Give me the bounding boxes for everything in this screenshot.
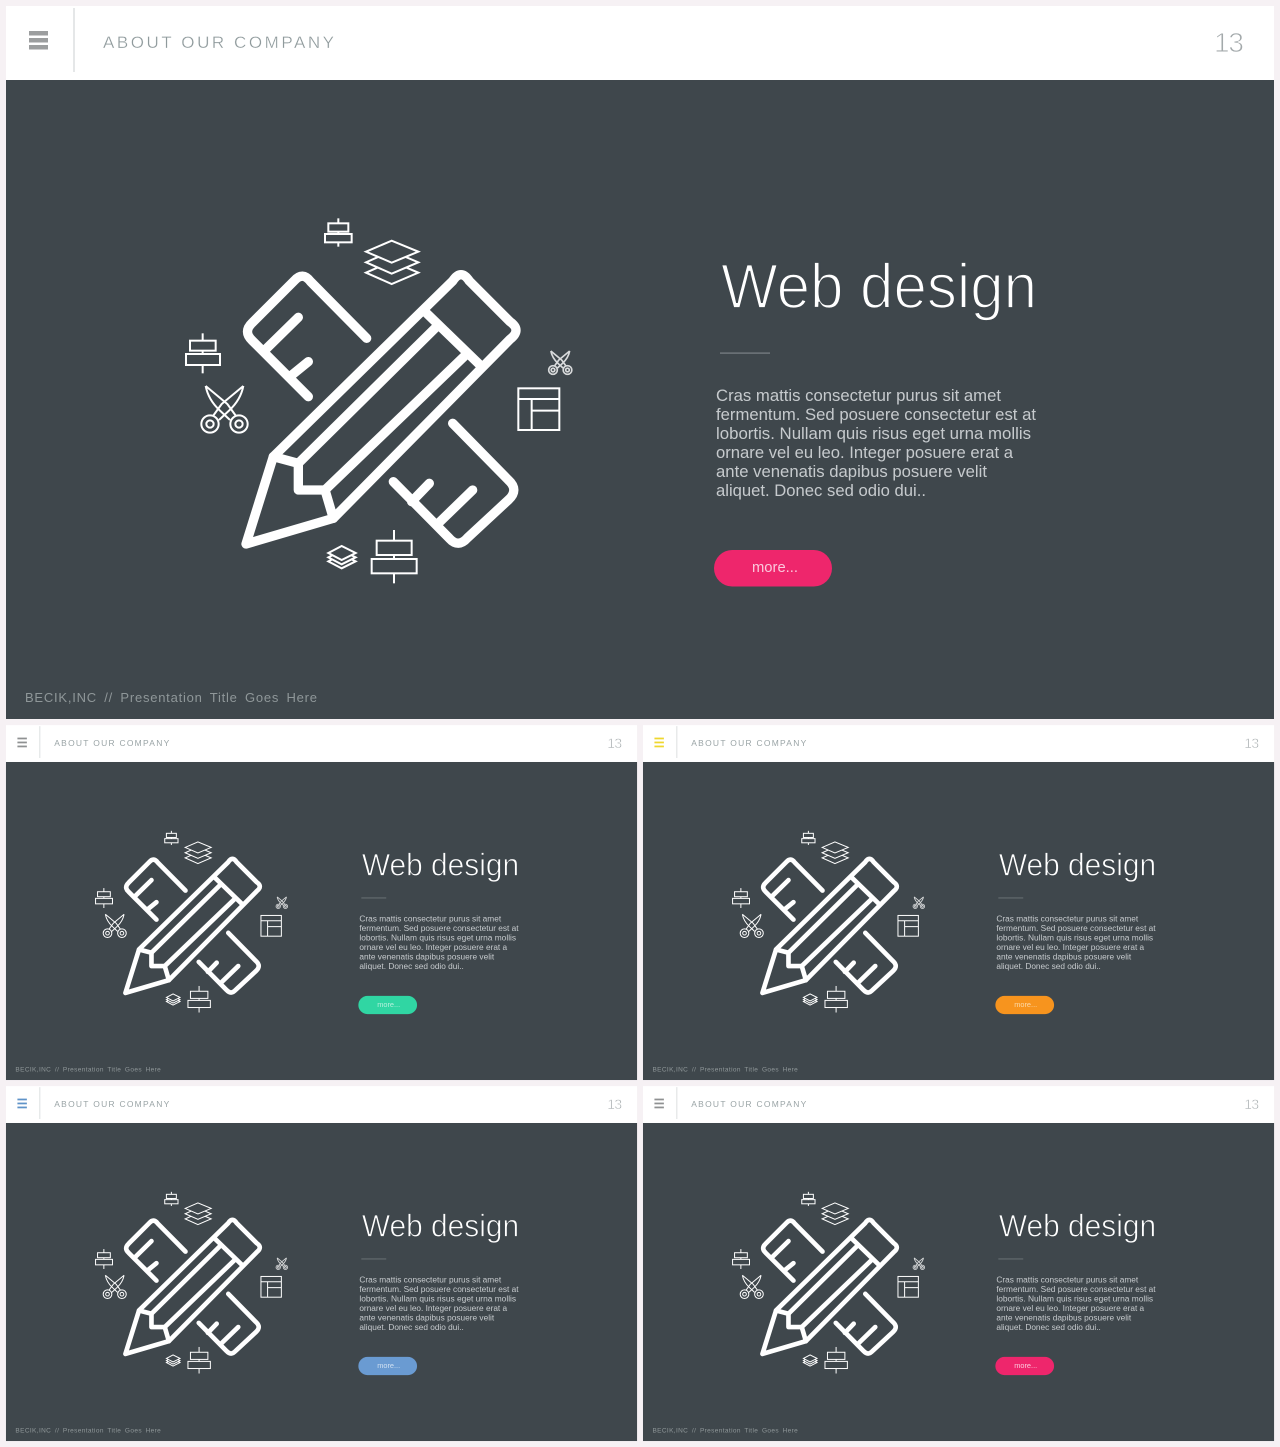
panel: main slide — [6, 6, 1274, 719]
body text: lobortis. Nullam quis risus eget urna mollis — [996, 1295, 1153, 1304]
button: more... — [1014, 1000, 1037, 1009]
icon: menu — [654, 738, 664, 747]
body text: ornare vel eu leo. Integer posuere erat a — [996, 943, 1145, 952]
body text: lobortis. Nullam quis risus eget urna mollis — [359, 934, 516, 943]
heading: Web design — [999, 1208, 1156, 1243]
body text: fermentum. Sed posuere consectetur est at — [996, 1285, 1156, 1294]
button: more... — [377, 1000, 400, 1009]
page number: 13 — [607, 735, 622, 751]
body text — [996, 1276, 1156, 1332]
footer text: BECIK,INC // Presentation Title Goes Here — [15, 1067, 161, 1074]
icon: menu — [17, 738, 27, 747]
page number: 13 — [1244, 1096, 1259, 1112]
divider — [720, 352, 770, 354]
footer text: BECIK,INC // Presentation Title Goes Here — [15, 1428, 161, 1435]
header title: ABOUT OUR COMPANY — [54, 738, 170, 748]
body text: fermentum. Sed posuere consectetur est at — [716, 406, 1036, 424]
header bar — [6, 6, 1274, 80]
body text: Cras mattis consectetur purus sit amet — [716, 387, 1001, 405]
panel: slide pink — [643, 1086, 1274, 1441]
button — [358, 996, 417, 1014]
body text: ornare vel eu leo. Integer posuere erat a — [716, 444, 1014, 462]
body text — [716, 387, 1036, 500]
body text: fermentum. Sed posuere consectetur est at — [996, 924, 1156, 933]
illustration — [96, 1192, 288, 1374]
body text: ante venenatis dapibus posuere velit — [359, 953, 495, 962]
illustration — [733, 1192, 925, 1374]
heading: Web design — [362, 1208, 519, 1243]
illustration — [96, 831, 288, 1013]
body text: fermentum. Sed posuere consectetur est at — [359, 1285, 519, 1294]
body text: aliquet. Donec sed odio dui.. — [359, 962, 464, 971]
illustration — [733, 831, 925, 1013]
body text — [359, 1276, 519, 1332]
header title: ABOUT OUR COMPANY — [54, 1099, 170, 1109]
button: more... — [377, 1361, 400, 1370]
header title: ABOUT OUR COMPANY — [103, 33, 334, 52]
body text — [359, 915, 519, 971]
body text: ornare vel eu leo. Integer posuere erat a — [359, 1304, 508, 1313]
icon: menu — [17, 1099, 27, 1108]
body text: ante venenatis dapibus posuere velit — [716, 463, 987, 481]
icon: menu — [654, 1099, 664, 1108]
icon: menu — [29, 31, 48, 50]
body text: ornare vel eu leo. Integer posuere erat a — [359, 943, 508, 952]
heading: Web design — [362, 847, 519, 882]
page number: 13 — [607, 1096, 622, 1112]
page number: 13 — [1214, 27, 1244, 58]
body text: lobortis. Nullam quis risus eget urna mollis — [359, 1295, 516, 1304]
body text: Cras mattis consectetur purus sit amet — [359, 1276, 502, 1285]
body text: aliquet. Donec sed odio dui.. — [996, 962, 1101, 971]
body text: fermentum. Sed posuere consectetur est at — [359, 924, 519, 933]
body text: ante venenatis dapibus posuere velit — [359, 1314, 495, 1323]
body text: ornare vel eu leo. Integer posuere erat a — [996, 1304, 1145, 1313]
heading: Web design — [999, 847, 1156, 882]
body text: ante venenatis dapibus posuere velit — [996, 953, 1132, 962]
button — [995, 996, 1054, 1014]
heading: Web design — [721, 252, 1037, 322]
body text: ante venenatis dapibus posuere velit — [996, 1314, 1132, 1323]
footer text: BECIK,INC // Presentation Title Goes Here — [25, 690, 317, 705]
body text: aliquet. Donec sed odio dui.. — [716, 482, 926, 500]
button — [995, 1357, 1054, 1375]
body text: Cras mattis consectetur purus sit amet — [359, 915, 502, 924]
panel: slide teal — [6, 725, 637, 1080]
panel: slide orange — [643, 725, 1274, 1080]
footer text: BECIK,INC // Presentation Title Goes Here — [652, 1428, 798, 1435]
body text: Cras mattis consectetur purus sit amet — [996, 915, 1139, 924]
footer text: BECIK,INC // Presentation Title Goes Here — [652, 1067, 798, 1074]
illustration: pencil and ruler — [186, 218, 572, 583]
body text: lobortis. Nullam quis risus eget urna mollis — [716, 425, 1031, 443]
body text — [996, 915, 1156, 971]
button — [358, 1357, 417, 1375]
header title: ABOUT OUR COMPANY — [691, 1099, 807, 1109]
page number: 13 — [1244, 735, 1259, 751]
button — [714, 550, 832, 586]
dark panel — [6, 80, 1274, 719]
body text: Cras mattis consectetur purus sit amet — [996, 1276, 1139, 1285]
button: more... — [1014, 1361, 1037, 1370]
body text: aliquet. Donec sed odio dui.. — [996, 1323, 1101, 1332]
button: more... — [752, 559, 798, 576]
panel: slide blue — [6, 1086, 637, 1441]
header title: ABOUT OUR COMPANY — [691, 738, 807, 748]
body text: aliquet. Donec sed odio dui.. — [359, 1323, 464, 1332]
body text: lobortis. Nullam quis risus eget urna mollis — [996, 934, 1153, 943]
